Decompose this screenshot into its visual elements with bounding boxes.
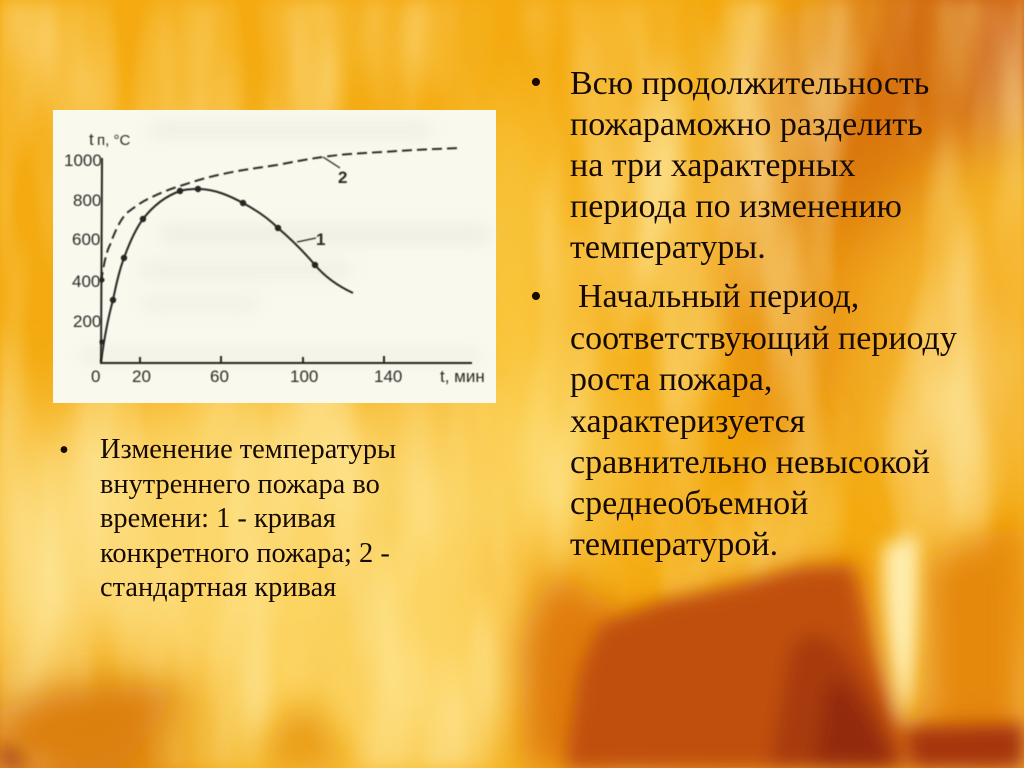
curve 2: standard (dashed) <box>101 148 460 282</box>
axis labels: 100 <box>290 367 318 386</box>
axis labels: 1 <box>316 230 325 249</box>
axis labels: 800 <box>73 191 101 210</box>
axis labels: 20 <box>132 367 151 386</box>
panel: temperature chart <box>53 110 496 403</box>
text block: right column first bullet <box>530 64 929 266</box>
text block: right column second bullet <box>530 278 957 563</box>
axis labels: 60 <box>210 367 229 386</box>
axis labels: 0 <box>91 367 100 386</box>
first paragraph: на три характерных <box>570 147 856 184</box>
first paragraph: температуры. <box>570 229 766 266</box>
axis labels: 1000 <box>64 151 102 170</box>
axes <box>101 158 472 363</box>
caption lines: Изменение температуры <box>100 434 396 465</box>
second paragraph: роста пожара, <box>570 361 772 398</box>
bullet: caption: • <box>59 435 69 466</box>
caption lines: конкретного пожара; 2 - <box>100 538 390 569</box>
axis labels: 600 <box>72 230 100 249</box>
caption lines: времени: 1 - кривая <box>100 503 336 534</box>
second paragraph: характеризуется <box>570 403 806 440</box>
axis labels <box>64 130 485 386</box>
axis labels: 140 <box>374 367 402 386</box>
caption lines: внутреннего пожара во <box>100 469 380 500</box>
first paragraph: Всю продолжительность <box>570 65 929 102</box>
axis labels: t <box>89 130 94 149</box>
first paragraph: пожараможно разделить <box>570 106 923 143</box>
curve 1: actual fire <box>100 157 353 362</box>
axis labels: 400 <box>72 272 100 291</box>
axis labels: 200 <box>73 312 101 331</box>
scan noise <box>80 125 490 360</box>
second paragraph: среднеобъемной <box>570 485 808 522</box>
axis labels: t, мин <box>440 367 485 386</box>
second paragraph: Начальный период, <box>578 278 859 315</box>
first paragraph: периода по изменению <box>570 188 902 225</box>
second paragraph: сравнительно невысокой <box>570 444 930 481</box>
second paragraph: соответствующий периоду <box>570 320 957 357</box>
second paragraph: температурой. <box>570 526 778 563</box>
axis labels: 2 <box>338 168 347 187</box>
caption lines: стандартная кривая <box>100 572 336 603</box>
bullet: first: • <box>530 64 542 101</box>
caption: left text block <box>59 434 396 603</box>
bullet: second: • <box>530 278 542 315</box>
axis labels: п, °C <box>97 132 130 149</box>
